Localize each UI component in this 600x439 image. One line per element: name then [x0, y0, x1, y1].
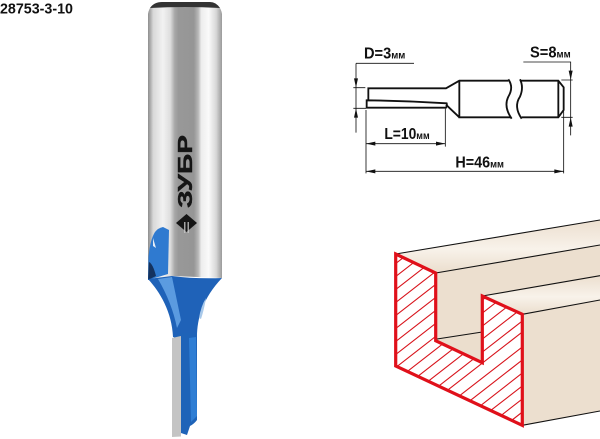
bit outline [367, 79, 564, 119]
brand logo icon [176, 214, 197, 233]
carbide blade [172, 336, 181, 437]
dimension diagram [353, 45, 573, 173]
label H: H=46мм [455, 154, 504, 171]
dimension lines [353, 62, 573, 173]
hatched cross-section [394, 252, 524, 428]
router bit photo [148, 2, 222, 437]
dimension arrowheads [354, 71, 573, 173]
blue flute on shank [148, 227, 169, 280]
groove wall and floor [436, 245, 600, 339]
blue cutting body [173, 333, 197, 435]
blue neck [148, 276, 222, 337]
wood edge lines [396, 220, 600, 425]
label S: S=8мм [530, 45, 571, 62]
wood top surfaces [396, 220, 600, 273]
brand name: ЗУБР [175, 135, 197, 208]
wood side face [522, 300, 600, 425]
label D: D=3мм [364, 45, 405, 62]
label L: L=10мм [384, 126, 430, 143]
shank [148, 6, 222, 280]
groove profile illustration [394, 220, 600, 428]
shank end cap [150, 2, 220, 8]
title: article number: 28753-3-10 [0, 2, 73, 18]
